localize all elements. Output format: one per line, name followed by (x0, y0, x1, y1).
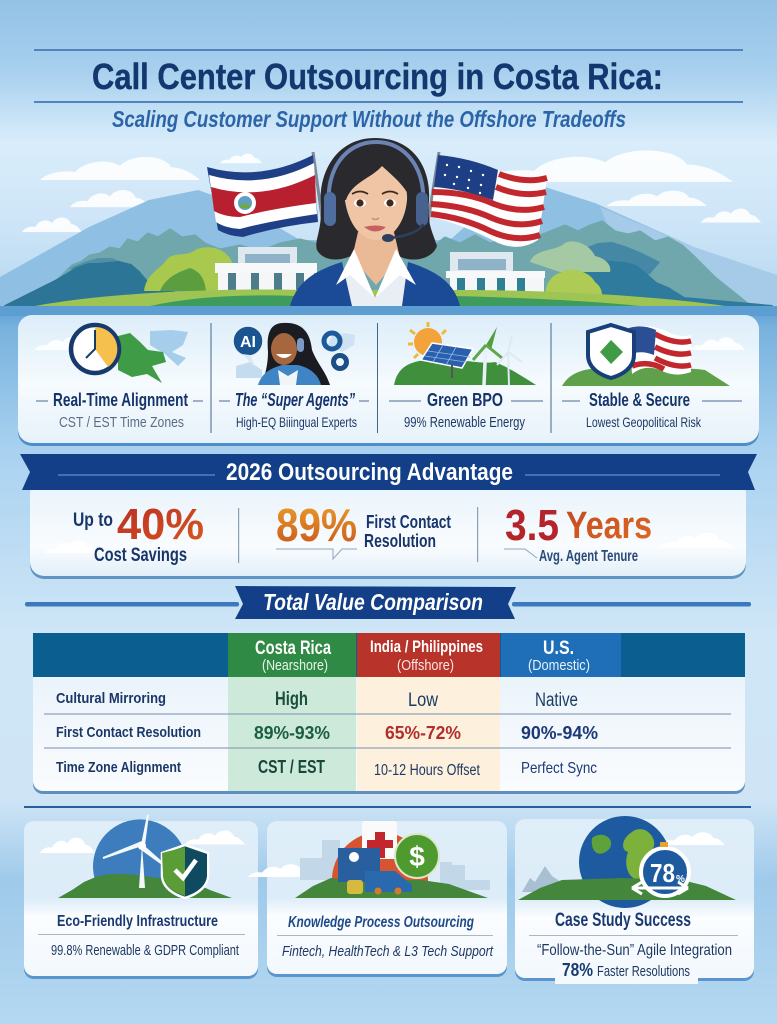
office building right (446, 252, 545, 293)
row: Cultural Mirroring: Low (408, 690, 438, 711)
Green BPO text: Green BPO (427, 390, 503, 410)
header: India / Philippines: (Offshore) (397, 657, 454, 674)
card text: Case Study Success (555, 910, 691, 931)
row: Cultural Mirroring: Cultural Mirroring (56, 690, 166, 707)
icon: globe and 78 badge: % (676, 874, 685, 885)
panel: four key benefits (18, 315, 759, 446)
Real-Time Alignment text (36, 390, 203, 431)
white tab under card (555, 965, 698, 984)
row: Cultural Mirroring (56, 689, 578, 711)
Green BPO text (389, 390, 543, 431)
stat: cost savings: 40% (117, 500, 204, 549)
forest: dark layer (5, 262, 215, 306)
office building left (215, 247, 317, 291)
shirt (342, 266, 410, 306)
distant trees (522, 866, 570, 892)
hair back (316, 138, 437, 260)
hero scene: agent, flags and landscape (0, 138, 777, 316)
banner: 2026 Outsourcing Advantage: 2026 Outsourcing Advantage (226, 459, 513, 486)
The Super Agents text (219, 390, 369, 430)
stat: cost savings: Up to (73, 510, 113, 531)
card text: “Follow-the-Sun” Agile Integration (537, 942, 732, 959)
mountains (0, 187, 777, 306)
row: First Contact Resolution: 90%-94% (521, 723, 598, 743)
row: Cultural Mirroring: Native (535, 690, 578, 711)
stat: first contact resolution: 89% (276, 499, 357, 551)
banner: 2026 Outsourcing Advantage (20, 454, 757, 490)
Real-Time Alignment text: Real-Time Alignment (53, 390, 188, 410)
blue band under hero (0, 306, 777, 316)
card text: Faster Resolutions (597, 964, 690, 980)
stat: first contact resolution (276, 499, 451, 559)
icon: clock and map (71, 325, 188, 383)
icon: AI super agent (233, 323, 355, 385)
icon: AI super agent: AI (240, 334, 256, 351)
card: case study success (515, 816, 754, 984)
eyes and brows (352, 192, 398, 220)
Costa Rica flag (207, 152, 323, 237)
row: Time Zone Alignment (56, 757, 597, 779)
panel: 2026 stats (30, 480, 746, 579)
stat: first contact resolution: First Contact (366, 512, 451, 532)
header: U.S.: U.S. (543, 638, 574, 659)
The Super Agents text: High-EQ Biiingual Experts (236, 414, 357, 430)
column tint: Costa Rica (228, 677, 356, 791)
banner: Total Value Comparison (25, 586, 751, 619)
comparison table (33, 633, 745, 794)
row: Cultural Mirroring: High (275, 689, 308, 710)
collar (336, 249, 416, 298)
header: U.S. (501, 633, 621, 677)
row: Time Zone Alignment: Time Zone Alignment (56, 759, 181, 776)
title block (34, 49, 743, 132)
face (344, 164, 407, 240)
card text (38, 913, 245, 959)
card text: 99.8% Renewable & GDPR Compliant (51, 943, 239, 959)
headset (324, 142, 428, 242)
row: Time Zone Alignment: CST / EST (258, 757, 325, 777)
stat: agent tenure (504, 501, 652, 565)
header: India / Philippines: India / Philippines (370, 637, 483, 656)
header: U.S.: (Domestic) (528, 657, 590, 674)
row: Time Zone Alignment: Perfect Sync (521, 760, 597, 777)
icon: wind turbine and shield (58, 815, 232, 898)
card text: Fintech, HealthTech & L3 Tech Support (282, 943, 494, 960)
stat: cost savings (73, 500, 204, 566)
stat: agent tenure: 3.5 (505, 501, 559, 550)
Stable and Secure text (562, 390, 742, 430)
header: Costa Rica: Costa Rica (255, 638, 331, 659)
stat: cost savings: Cost Savings (94, 545, 187, 566)
row: First Contact Resolution (56, 723, 598, 743)
mouth (364, 226, 386, 232)
Stable and Secure text: Stable & Secure (589, 390, 690, 410)
row: First Contact Resolution: 89%-93% (254, 723, 330, 743)
Real-Time Alignment text: CST / EST Time Zones (59, 414, 184, 431)
neck (352, 232, 400, 285)
icon: globe and 78 badge: 78 (650, 858, 675, 888)
stat: first contact resolution: Resolution (364, 531, 436, 551)
card: knowledge process outsourcing (248, 821, 507, 977)
icon: KPO cluster (295, 821, 488, 898)
United States flag (428, 152, 548, 247)
call center agent (290, 138, 460, 306)
subtitle: Scaling Customer Support Without the Offshore Tradeoffs (112, 106, 626, 132)
header: Costa Rica: (Nearshore) (262, 657, 328, 674)
Green BPO text: 99% Renewable Energy (404, 415, 526, 431)
row: First Contact Resolution: First Contact Resolution (56, 724, 201, 741)
header: India / Philippines (357, 633, 500, 677)
blazer (290, 262, 460, 306)
stat: agent tenure: Years (566, 505, 652, 547)
card text: Knowledge Process Outsourcing (288, 914, 474, 931)
forest: mid layer (25, 222, 750, 306)
icon: KPO cluster: $ (409, 841, 425, 872)
title: Call Center Outsourcing in Costa Rica: (92, 56, 663, 97)
row: First Contact Resolution: 65%-72% (385, 723, 461, 743)
card text (529, 910, 738, 980)
card text: Eco-Friendly Infrastructure (57, 913, 218, 930)
icon: solar and wind (394, 322, 536, 385)
header: Costa Rica (228, 633, 356, 677)
card text: 78% (562, 960, 593, 980)
Stable and Secure text: Lowest Geopolitical Risk (586, 414, 702, 430)
column tint: India / Philippines (357, 677, 500, 791)
fringe (340, 150, 410, 200)
card: eco-friendly infrastructure (24, 815, 258, 979)
clouds (22, 150, 761, 232)
bushes (144, 247, 232, 291)
icon: shield and flag (562, 325, 730, 386)
icon: globe and 78 badge (518, 816, 736, 908)
row: Time Zone Alignment: 10-12 Hours Offset (374, 762, 481, 779)
The Super Agents text: The “Super Agents” (235, 390, 355, 410)
stat: agent tenure: Avg. Agent Tenure (539, 548, 638, 565)
skyline (300, 840, 490, 890)
card text (277, 914, 494, 960)
lawn (35, 290, 725, 306)
banner: Total Value Comparison: Total Value Comparison (263, 589, 483, 615)
